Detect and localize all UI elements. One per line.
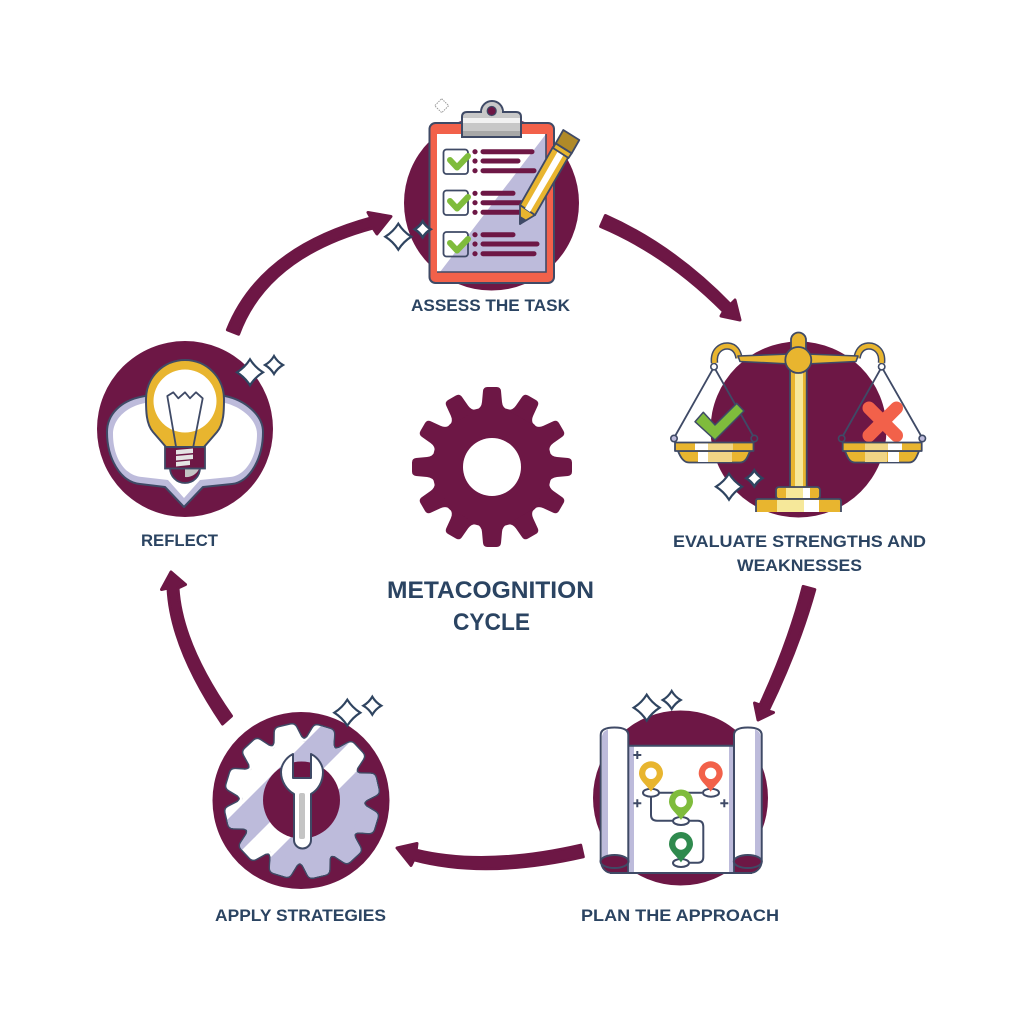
label: PLAN THE APPROACH [581,906,779,925]
icon: burgundy disc [212,712,390,889]
icon: light bulb [146,360,224,483]
arrow: reflect to assess [227,212,391,334]
sparkle [237,359,263,385]
title: CYCLE [453,609,530,636]
arrow: evaluate to plan [754,586,815,720]
panel: plan the approach [581,691,779,925]
sparkle [385,224,411,250]
arrow: plan to apply [397,844,583,869]
sparkle [663,691,681,709]
label: ASSESS THE TASK [411,296,571,315]
sparkle [265,356,283,374]
checklist [444,149,537,256]
title [387,577,594,636]
panel: assess the task [385,99,579,315]
panel: evaluate strengths and weaknesses [671,333,926,575]
column [790,366,807,488]
icon: burgundy disc [404,116,579,290]
route lines [633,751,728,867]
base [776,487,820,499]
icon: pencil [520,130,579,224]
icon: burgundy disc [710,342,886,518]
panel: apply strategies [212,697,390,925]
icon: clipboard [430,101,554,283]
arrow: apply to reflect [162,572,232,724]
sparkle [334,700,360,726]
sparkle: faint [435,99,449,113]
icon: wrench [281,754,323,848]
panel: reflect [97,341,283,550]
arrow: assess to evaluate [601,216,740,320]
icon: map scroll [600,728,762,873]
icon: thought cloud [107,396,263,507]
icon: balance scale [671,333,926,512]
label: REFLECT [141,531,219,550]
title: METACOGNITION [387,577,594,604]
icon: green check [695,403,744,440]
label: APPLY STRATEGIES [215,906,386,925]
icon: green pin [669,790,693,820]
sparkle [634,695,660,721]
label [673,532,926,575]
curled beam [714,346,739,363]
strings [674,367,922,438]
sparkle [716,474,742,500]
label: EVALUATE STRENGTHS AND [673,532,926,551]
icon: outlined gear [222,721,382,881]
left pan [675,442,754,462]
sparkle [746,470,762,486]
sparkle [363,697,381,715]
icon: coral pin [699,761,723,792]
icon: central gear [412,387,572,547]
sparkle [415,221,431,237]
icon: burgundy disc [97,341,273,517]
icon: dark green pin [669,832,693,862]
icon: yellow pin [639,761,663,792]
icon: red cross [869,408,896,436]
right pan [843,442,922,462]
label: WEAKNESSES [737,556,862,575]
icon: burgundy disc [593,710,768,886]
